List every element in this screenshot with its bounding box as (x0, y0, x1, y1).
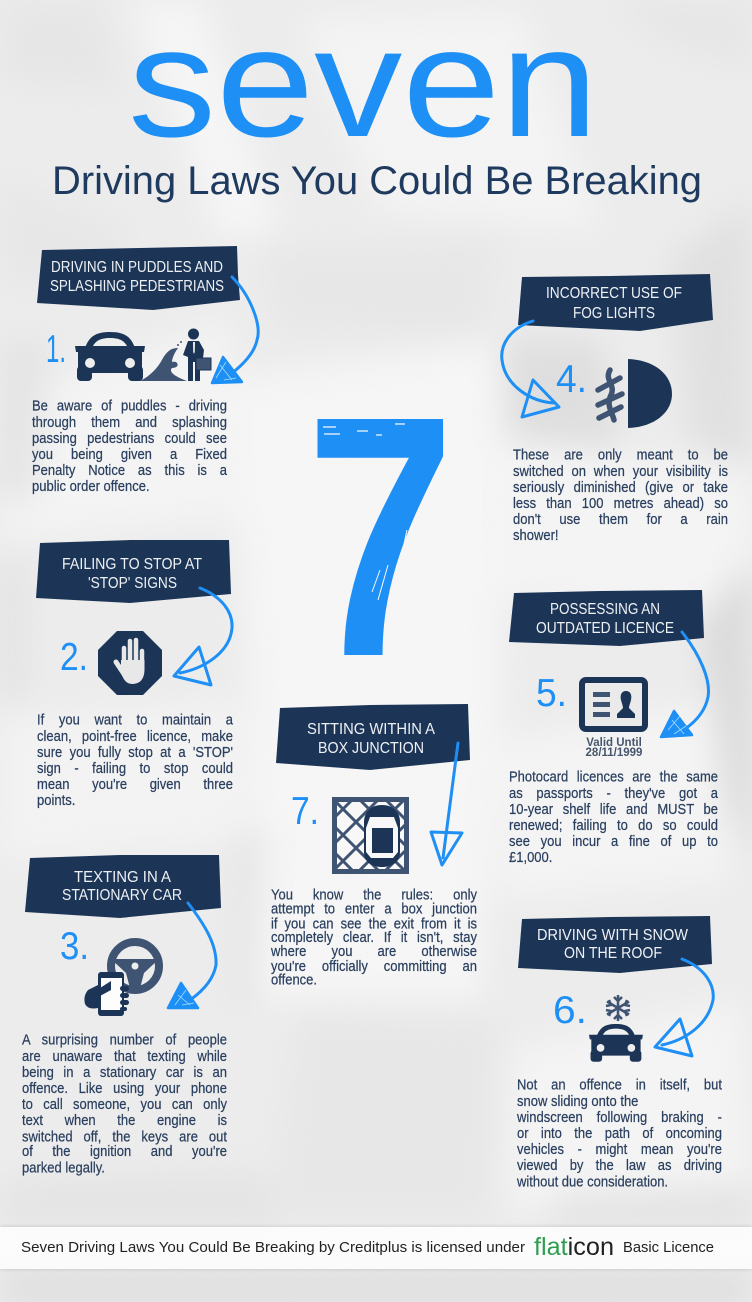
body text 1: Penalty Notice as this is a (32, 461, 227, 478)
body text 1: Be aware of puddles - driving (32, 397, 227, 414)
panel: texting in a stationary car (22, 855, 228, 1176)
body text 3: of the ignition and you're (22, 1143, 227, 1160)
banner 5 (509, 590, 704, 646)
icon: hand holding phone (84, 972, 129, 1016)
body text 2: sure you fully stop at a 'STOP' (37, 743, 233, 760)
body text 4: These are only meant to be (513, 446, 728, 463)
icon: steering wheel (111, 942, 159, 992)
banner 7: SITTING WITHIN A (307, 721, 435, 738)
icon: photocard licence (582, 680, 645, 729)
body text 4: shower! (513, 526, 559, 543)
banner 3: STATIONARY CAR (62, 887, 182, 904)
body text 6: vehicles - might mean you're (517, 1140, 722, 1157)
body text 1: passing pedestrians could see (32, 429, 227, 446)
body text 5: as passports - they've got a (509, 784, 718, 801)
body text 4: seriously diminished (give or take (513, 478, 728, 495)
body text 2 (37, 711, 234, 808)
body text 3: offence. Like using your phone (22, 1079, 227, 1096)
footer licence band (0, 1227, 752, 1269)
body text 3: to call someone, you can only (22, 1095, 227, 1112)
banner 1: DRIVING IN PUDDLES AND (51, 259, 223, 276)
banner 2 (36, 540, 231, 603)
title: seven: seven (128, 0, 598, 170)
banner 6 (518, 916, 712, 973)
body text 7: You know the rules: only (271, 886, 477, 903)
arrow 2 (174, 588, 232, 685)
body text 5: Photocard licences are the same (509, 768, 718, 785)
body text 2: points. (37, 791, 75, 808)
body text 2: sign - failing to stop could (37, 759, 233, 776)
number 2: 2. (60, 636, 88, 679)
banner 2: 'STOP' SIGNS (88, 575, 177, 592)
valid until label: Valid Until (586, 737, 642, 749)
subtitle: Driving Laws You Could Be Breaking (52, 159, 702, 203)
icon: snowflake (606, 995, 630, 1021)
body text 3: switched off, the keys are out (22, 1127, 227, 1144)
arrow 4 (502, 321, 559, 417)
body text 4: switched on when your visibility is (513, 462, 728, 479)
arrow 1 (212, 277, 258, 383)
body text 6: snow sliding onto the (517, 1092, 638, 1109)
body text 3: text when the engine is (22, 1111, 227, 1128)
valid until label: 28/11/1999 (586, 747, 642, 759)
body text 7: attempt to enter a box junction (271, 900, 477, 917)
banner 4: FOG LIGHTS (573, 305, 655, 322)
body text 5: see you incur a fine of up to (509, 832, 718, 849)
number 4: 4. (556, 358, 587, 401)
icon: car (589, 1024, 643, 1062)
banner 7: BOX JUNCTION (318, 740, 424, 757)
number 7: 7. (291, 790, 319, 833)
number 6: 6. (553, 989, 587, 1032)
arrow 6 (655, 959, 713, 1056)
body text 2: clean, point-free licence, make (37, 727, 233, 744)
body text 6: Not an offence in itself, but (517, 1076, 722, 1093)
body text 4: don't use them for a rain (513, 510, 728, 527)
banner 7 (276, 704, 470, 770)
number 3: 3. (60, 925, 89, 968)
arrow 3 (168, 903, 216, 1008)
body text 1: you being given a Fixed (32, 445, 227, 462)
banner 4 (518, 274, 713, 331)
icon: splash (140, 341, 187, 381)
body text 6: or into the path of oncoming (517, 1124, 722, 1141)
banner 1 (37, 246, 240, 310)
body text 6: windscreen following braking - (517, 1108, 722, 1125)
licence name: Basic Licence (623, 1239, 714, 1256)
body text 4 (513, 446, 728, 543)
body text 5: £1,000. (509, 848, 552, 865)
valid until label (586, 737, 642, 759)
body text 7: you're officially committing an (271, 957, 477, 974)
body text 5: 10-year shelf life and MUST be (509, 800, 718, 817)
body text 3: A surprising number of people (22, 1031, 227, 1048)
body text 2: mean you're given three (37, 775, 233, 792)
body text 6: viewed by the law as driving (517, 1156, 722, 1173)
body text 1 (32, 397, 228, 494)
body text 3: parked legally. (22, 1159, 105, 1176)
number 5: 5. (536, 672, 567, 715)
body text 7: offence. (271, 971, 317, 988)
panel: stop signs (36, 540, 234, 808)
body text 3 (22, 1031, 228, 1176)
panel: outdated licence (509, 590, 718, 865)
big numeral 7: 7 (306, 346, 455, 729)
body text 6 (516, 1076, 722, 1189)
body text 5: renewed; failing to do so could (509, 816, 718, 833)
body text 5 (509, 768, 718, 865)
banner 3 (25, 855, 221, 918)
body text 2: If you want to maintain a (37, 711, 233, 728)
body text 7: if you can see the exit from it is (271, 914, 477, 931)
icon: box junction with car (334, 799, 407, 872)
banner 3: TEXTING IN A (74, 869, 171, 886)
body text 3: are unaware that texting while (22, 1047, 227, 1064)
icon: car (75, 332, 145, 381)
banner 6: DRIVING WITH SNOW (537, 927, 689, 944)
flaticon logo: flaticon (534, 1233, 614, 1261)
banner 4: INCORRECT USE OF (546, 285, 682, 302)
banner 1: SPLASHING PEDESTRIANS (50, 278, 224, 295)
body text 7 (270, 886, 478, 988)
body text 7: completely clear. If it isn't, stay (271, 928, 477, 946)
panel: driving in puddles (32, 246, 260, 494)
panel: snow on the roof (516, 916, 722, 1189)
arrow 7 (431, 743, 462, 865)
banner 5: POSSESSING AN (550, 601, 660, 618)
body text 1: through them and splashing (32, 413, 227, 430)
icon: fog light (598, 359, 672, 428)
icon: pedestrian with briefcase (183, 328, 211, 381)
body text 4: less than 100 metres ahead) so (513, 494, 728, 511)
icon: stop hand (98, 631, 162, 695)
arrow 5 (661, 632, 708, 737)
licence text: Seven Driving Laws You Could Be Breaking by Creditplus is licensed under (21, 1239, 525, 1256)
body text 7: where you are otherwise (271, 942, 477, 960)
banner 6: ON THE ROOF (564, 945, 662, 962)
panel: box junction (270, 704, 478, 988)
body text 3: being in a stationary car is an (22, 1063, 227, 1080)
banner 2: FAILING TO STOP AT (62, 556, 202, 573)
panel: fog lights (500, 274, 728, 543)
banner 5: OUTDATED LICENCE (536, 620, 674, 637)
body text 6: without due consideration. (517, 1172, 668, 1189)
body text 1: public order offence. (32, 477, 150, 494)
number 1: 1. (46, 328, 66, 371)
